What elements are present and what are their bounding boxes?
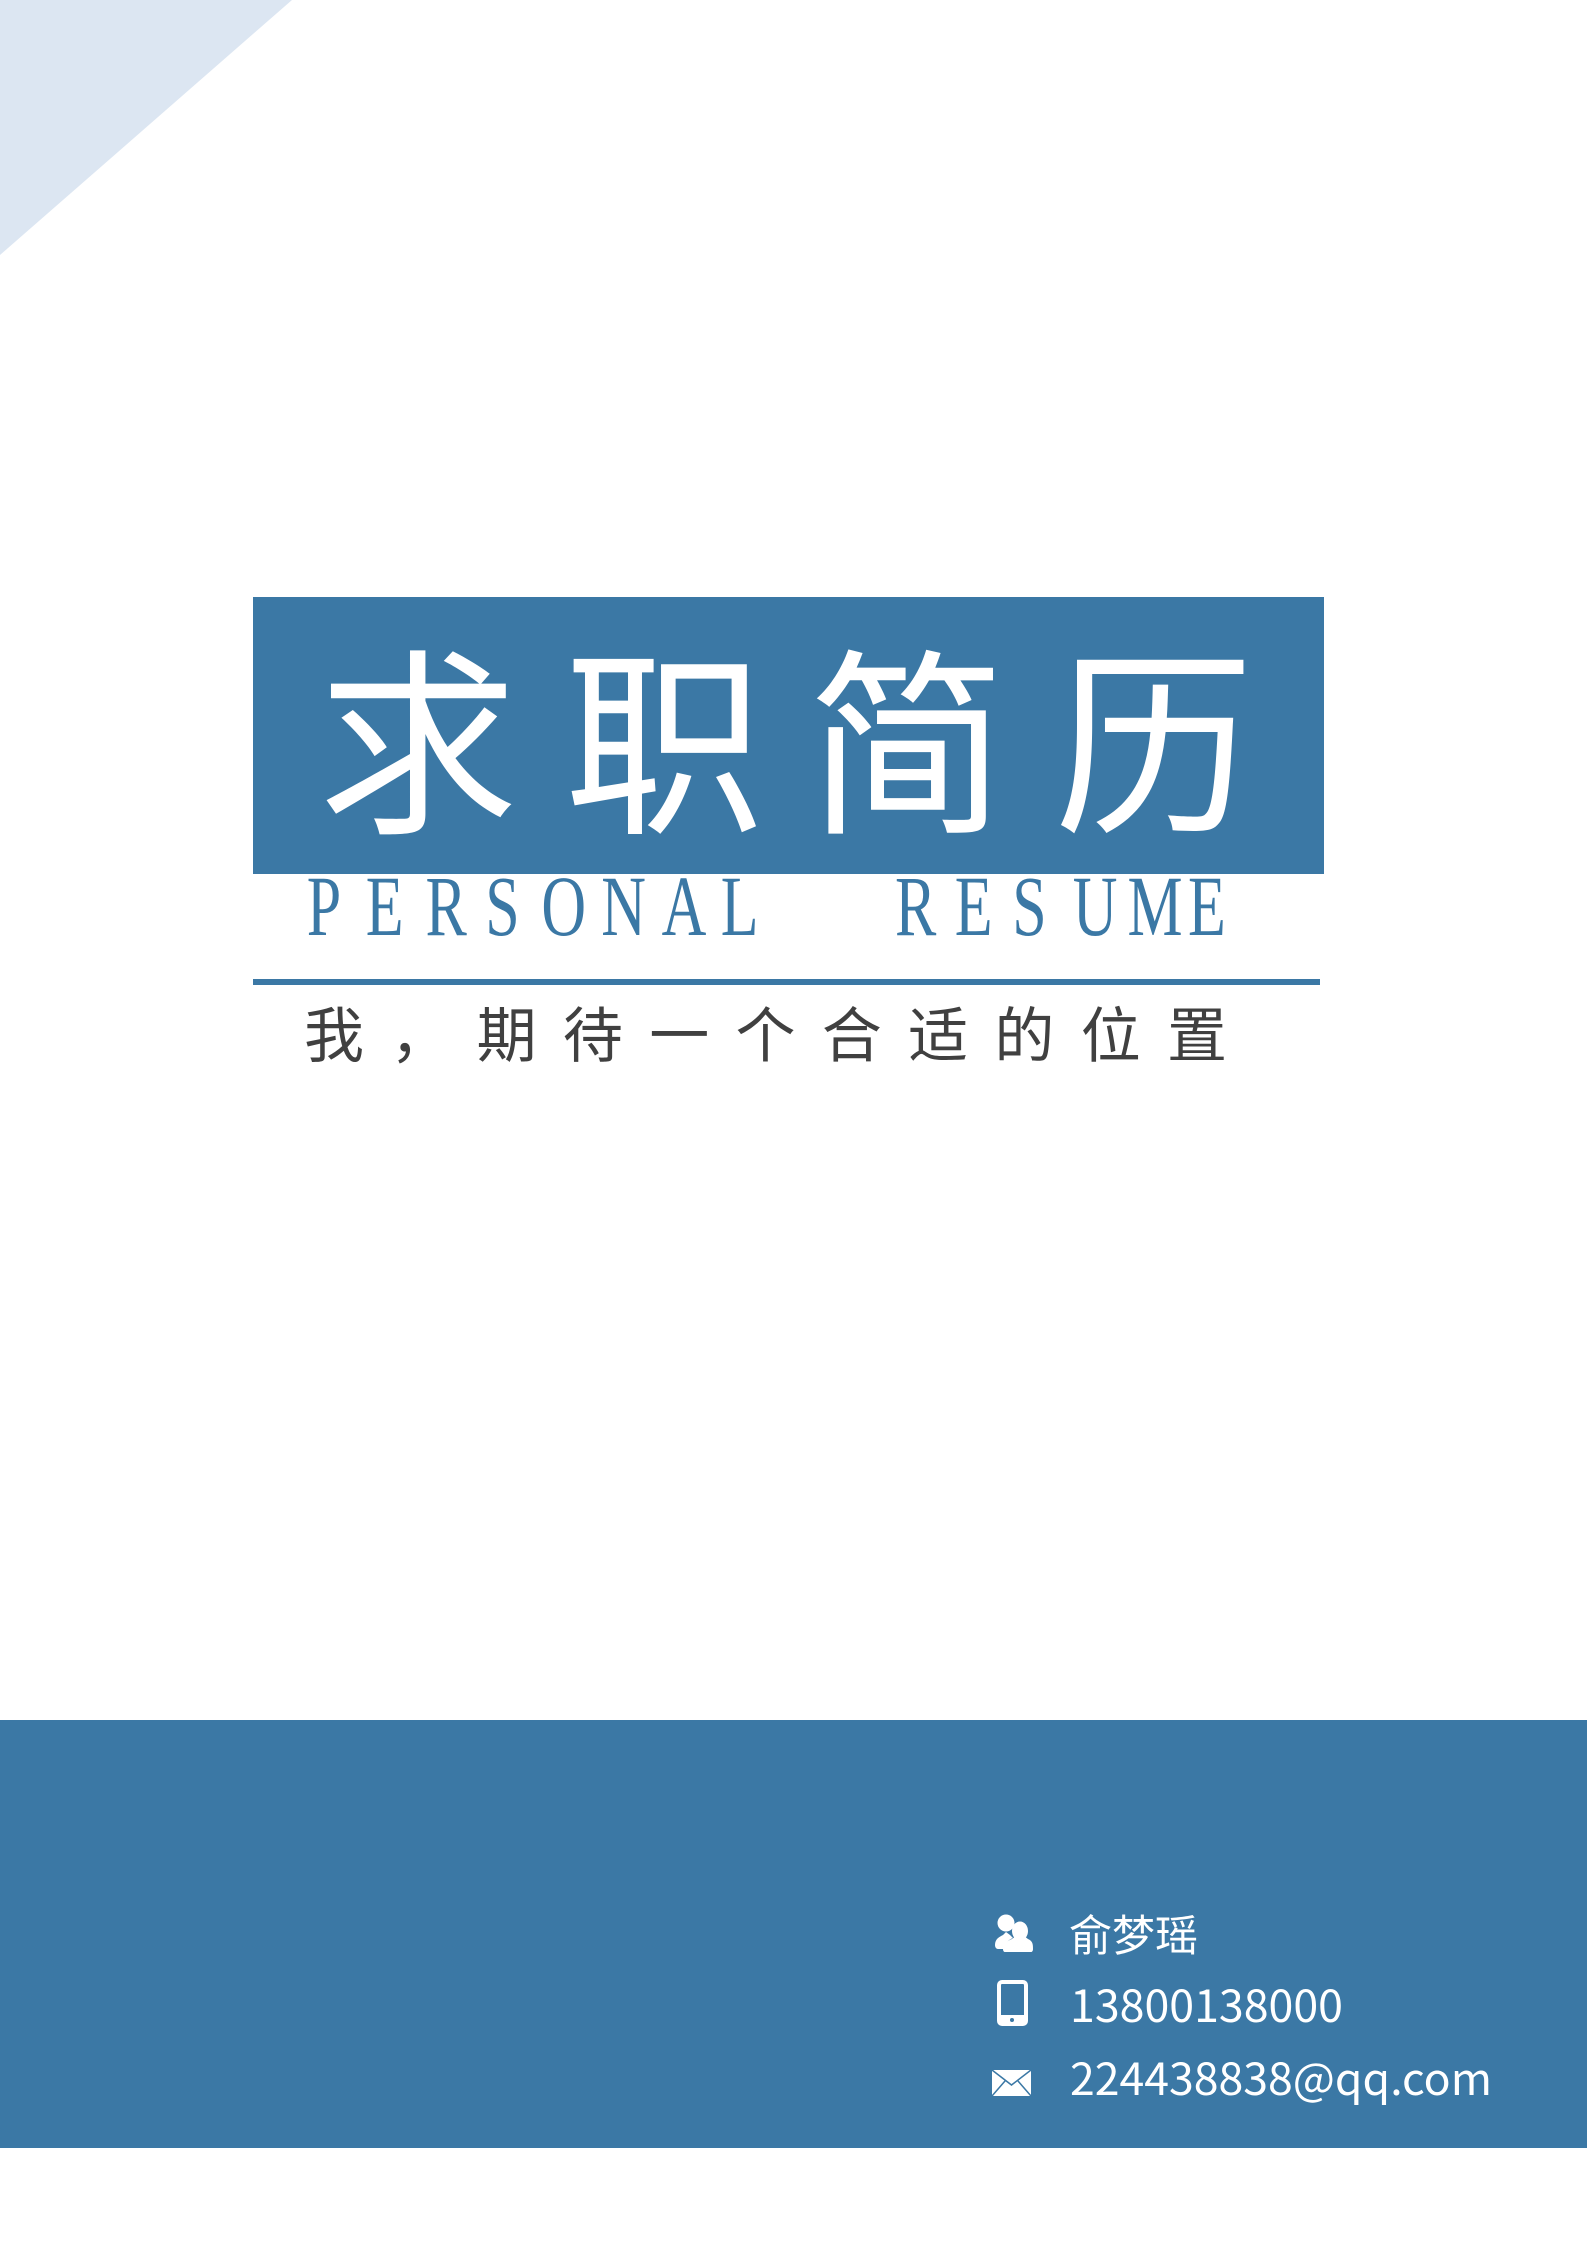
icon: people — [995, 1914, 1033, 1952]
decorative corner triangle — [0, 0, 292, 255]
divider rule — [253, 979, 1320, 985]
subtitle: PERSONAL RESUME: RESUME — [895, 859, 1226, 955]
name: 俞梦瑶 — [1069, 1902, 1198, 1964]
footer band — [0, 1720, 1587, 2148]
email: 224438838@qq.com — [1070, 2044, 1492, 2108]
icon: mobile phone — [999, 1982, 1026, 2024]
icon: envelope — [992, 2070, 1031, 2096]
contact block — [992, 1902, 1492, 2108]
subtitle: PERSONAL RESUME — [307, 859, 1226, 955]
title: 求职简历: 求职简历 — [318, 586, 1254, 876]
subtitle: PERSONAL RESUME: PERSONAL — [307, 859, 759, 955]
title banner — [253, 586, 1324, 876]
tagline: 我，期待一个合适的位置 — [304, 988, 1227, 1075]
phone number: 13800138000 — [1070, 1971, 1343, 2035]
